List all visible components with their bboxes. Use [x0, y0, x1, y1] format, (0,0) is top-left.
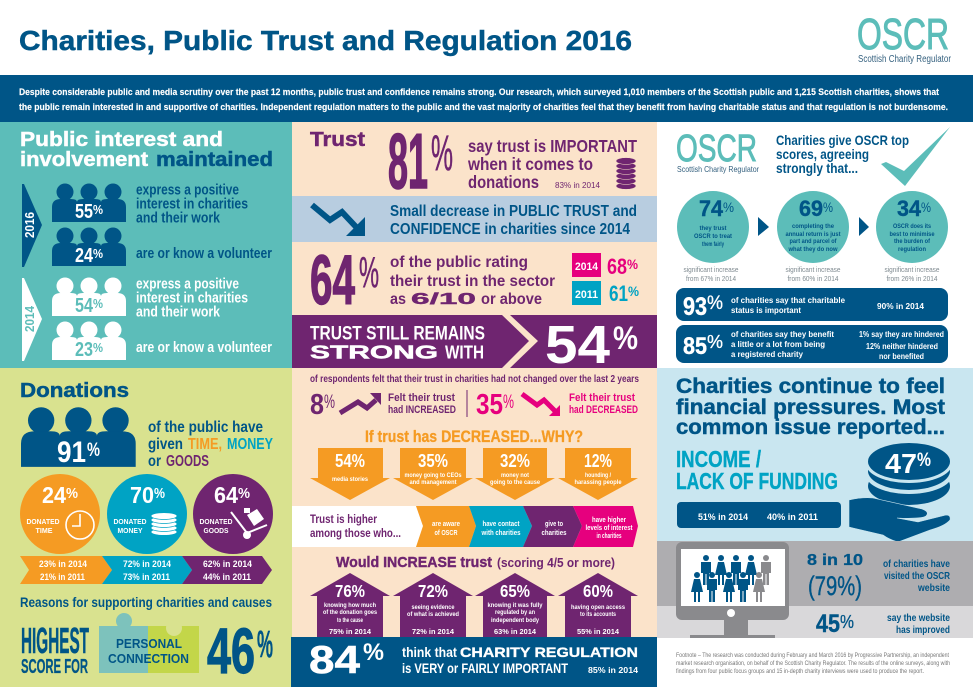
heading: would increase trust: [336, 554, 615, 571]
icon: people 54%: 54: [75, 295, 94, 317]
arrow: 76%: 76%: [335, 581, 365, 601]
heading: public interest: maintained: [156, 149, 273, 171]
band: small decrease: Small decrease in PUBLIC TRUST and: [390, 203, 637, 220]
circle: 74%: they trust: [700, 225, 727, 232]
band: charity regulation 84%: 85% in 2014: [588, 665, 638, 675]
circle: 74%: them fairly: [702, 241, 724, 248]
circle: donated time: DONATED: [26, 517, 60, 526]
text: volunteer 2016: are or know a volunteer: [136, 246, 272, 262]
circle: 74%: [677, 191, 749, 263]
text: significant increases: significant increase: [786, 265, 840, 274]
ribbon: previous years: 21% in 2011: [40, 572, 85, 582]
icon: puzzle personal connection: [99, 613, 199, 673]
text: website improved: has improved: [896, 624, 950, 636]
circle: 74%: %: [723, 199, 734, 215]
band: trust is higher: levels of interest: [586, 525, 633, 532]
bar: previous years: [677, 502, 841, 528]
bar: 85%: 12% neither hindered: [866, 342, 938, 351]
text: given time money goods: or: [148, 453, 161, 470]
logo: OSCR: Scottish Charity Regulator: [858, 54, 952, 65]
arrow: 32%: 32%: [500, 451, 530, 471]
icon: people 24%: 24: [75, 245, 94, 267]
text: visited website: of charities have: [883, 558, 950, 570]
bar: 93%: %: [707, 293, 723, 314]
arrow: 60%: [558, 573, 638, 638]
arrow: 65%: knowing it was fully: [488, 602, 543, 609]
circle: 69%: 69: [799, 196, 823, 221]
arrow: 60%: 55% in 2014: [577, 627, 620, 636]
ribbon: previous years: 23% in 2014: [39, 559, 87, 569]
text: positive interest 2014: interest in charities: [136, 290, 248, 306]
text: trust important: [467, 136, 637, 192]
text: public rating: or above: [481, 291, 542, 308]
band: trust still strong 54%: 54: [545, 315, 610, 375]
icon: people 55%: [52, 184, 126, 223]
stat: 8% increased: 8: [310, 389, 324, 421]
icon: people 23%: %: [93, 340, 103, 355]
stat: 8 in 10: [807, 552, 863, 601]
icon: trolley: [231, 508, 267, 539]
stat: 81%: 81: [388, 117, 428, 205]
icon: people 54%: %: [93, 296, 103, 311]
stat: 46%: 46: [207, 615, 255, 687]
ribbon: previous years: [20, 556, 272, 584]
circle: 69%: what they do now: [788, 246, 838, 253]
arrow: 32%: [475, 448, 555, 500]
stat: 35% decreased: %: [503, 392, 514, 413]
ribbon: previous years: 44% in 2011: [203, 572, 251, 582]
stat: 35% decreased: [476, 389, 638, 421]
icon: people 23%: [52, 322, 126, 361]
band: trust is higher: have contact: [482, 521, 520, 528]
text: significant increases: significant increase: [884, 265, 940, 274]
panel: website: [657, 541, 973, 638]
arrow: 76%: 75% in 2014: [329, 627, 372, 636]
heading: trust: Trust: [310, 129, 365, 151]
text: positive interest 2016: express a positive: [136, 182, 239, 198]
arrow: 65%: 65%: [500, 581, 530, 601]
text: trust important: when it comes to: [467, 154, 593, 174]
band: trust still strong 54%: %: [613, 320, 638, 356]
text: given time money goods: MONEY: [227, 436, 273, 453]
panel: OSCR scores: [676, 127, 950, 363]
band: trust is higher: among those who...: [310, 526, 401, 540]
band: trust still strong 54%: WITH: [445, 342, 484, 362]
text: significant increases: from 26% in 2014: [886, 274, 938, 283]
arrow: 54%: media stories: [332, 476, 368, 483]
band: trust is higher: Trust is higher: [310, 512, 377, 526]
icon: down arrow: [522, 394, 560, 416]
arrow: 2016: 2016: [22, 212, 37, 238]
bar: 93%: of charities say that charitable: [731, 296, 846, 305]
circle: donated goods: GOODS: [204, 526, 228, 535]
text: website improved: say the website: [887, 612, 950, 624]
circle: donated time: TIME: [36, 526, 52, 535]
stat: 35% decreased: had DECREASED: [569, 404, 638, 416]
stat: 2014 68%: %: [627, 256, 638, 272]
icon: puzzle personal connection: CONNECTION: [108, 651, 189, 666]
icon: people 91%: [21, 407, 136, 469]
circle: donated goods: %: [238, 485, 250, 502]
icon: people 55%: 55: [75, 201, 93, 223]
heading: financial pressures: financial pressures. Most: [676, 396, 945, 419]
band: charity regulation 84%: think that: [402, 645, 457, 660]
arrow: 12%: harassing people: [574, 479, 622, 486]
arrow: scores 1: [758, 217, 769, 236]
circle: 34%: 34: [897, 196, 922, 221]
text: positive interest 2016: and their work: [136, 210, 221, 226]
bar: previous years: 40% in 2011: [767, 512, 819, 523]
bar: 93%: 90% in 2014: [877, 301, 924, 311]
stat: 8 in 10: (79%): [808, 571, 862, 601]
band: trust is higher: give to: [545, 521, 563, 528]
bar: previous years: 51% in 2014: [698, 512, 749, 523]
bar: 93%: 93: [683, 293, 707, 321]
arrow: 54%: 54%: [335, 451, 365, 471]
footnote: [676, 652, 950, 675]
circle: donated goods: 64: [214, 482, 238, 508]
stat: 64%: %: [359, 248, 379, 297]
text: trust unchanged: of respondents felt that their trust in charities had not changed over the last 2 years: [310, 373, 639, 385]
panel: donations: %: [257, 624, 273, 666]
heading: public interest: involvement: [20, 149, 148, 171]
text: income lack of funding: [676, 446, 838, 494]
stat: 2011 61%: 61: [609, 281, 628, 306]
icon: people 54%: [52, 278, 126, 317]
band: trust is higher: charities: [542, 530, 567, 537]
bar: 85%: a little or a lot from being: [731, 340, 825, 349]
down arrows: reasons: [310, 448, 638, 500]
circle: 74%: 74: [699, 196, 724, 221]
band: charity regulation 84%: 84: [309, 639, 360, 682]
arrow: 54%: [310, 448, 390, 500]
panel: public interest: [0, 122, 292, 368]
text: given time money goods: [148, 419, 273, 470]
circle: 34%: regulation: [898, 246, 926, 253]
heading: reasons: Reasons for supporting charities and causes: [20, 594, 272, 610]
arrow: 72%: 72%: [418, 581, 448, 601]
band: trust is higher: with charities: [481, 530, 521, 537]
circle: 69%: [777, 191, 849, 263]
arrow: 32%: money not: [501, 472, 529, 479]
circle: 74%: OSCR to treat: [694, 233, 733, 240]
circle: 69%: %: [823, 199, 833, 215]
stat: 2014 68%: [572, 253, 638, 279]
band: trust is higher: have higher: [592, 517, 626, 524]
text: positive interest 2014: [136, 276, 248, 320]
text: public rating: as: [390, 291, 406, 308]
icon: people 24%: %: [93, 246, 103, 261]
circle: donated money: DONATED: [114, 517, 147, 526]
icon: people 91%: %: [87, 440, 100, 461]
text: public rating: of the public rating: [390, 254, 528, 271]
icon: up arrow: [340, 393, 381, 413]
band: trust is higher: [292, 506, 638, 547]
circle: donated time: [20, 474, 100, 554]
icon: puzzle personal connection: PERSONAL: [116, 636, 182, 651]
stat: 2014 68%: 2014: [575, 261, 599, 273]
arrow: 76%: to the cause: [337, 617, 363, 624]
panel: donations: [0, 368, 292, 687]
bar: 85%: of charities say they benefit: [731, 330, 834, 339]
band: trust is higher: in charities: [596, 533, 622, 540]
heading: top scores: [776, 132, 909, 176]
up arrows: would increase: [310, 573, 638, 638]
text: website improved: [887, 612, 950, 636]
stat: 2011 61%: [572, 281, 639, 306]
heading: financial pressures: [676, 375, 945, 439]
stat: 2011 61%: 2011: [575, 289, 598, 301]
band: trust still strong 54%: STRONG: [310, 342, 438, 362]
stat: 8% increased: %: [324, 392, 335, 413]
bar: 85%: nor benefited: [879, 352, 924, 361]
heading: would increase trust: (scoring 4/5 or more): [497, 556, 615, 570]
panel: trust: %: [431, 125, 453, 181]
arrow: 2014: 2014: [22, 305, 37, 332]
band: charity regulation 84%: %: [363, 639, 384, 666]
band: trust is higher: are aware: [432, 521, 460, 528]
text: highest score for: [21, 620, 89, 678]
arrow: 72%: of what is achieved: [407, 611, 459, 618]
band: charity regulation 84%: CHARITY REGULATION: [460, 645, 638, 660]
logo: OSCR small: OSCR: [676, 128, 757, 170]
heading: top scores: Charities give OSCR top: [776, 132, 909, 148]
icon: people 24%: [52, 228, 126, 267]
icon: coin stack: [616, 158, 636, 189]
arrow: 2014: [22, 278, 42, 361]
circle: donated money: [107, 474, 187, 554]
text: volunteer 2014: are or know a volunteer: [136, 340, 272, 356]
heading: top scores: scores, agreeing: [776, 146, 869, 162]
stat: 35% decreased: Felt their trust: [569, 392, 635, 404]
text: visited website: website: [917, 582, 950, 594]
band: charity regulation 84%: is VERY or FAIRLY IMPORTANT: [402, 660, 568, 676]
panel: donations: HIGHEST: [21, 620, 89, 661]
heading: why decreased: If trust has DECREASED...WHY?: [365, 428, 583, 446]
arrow: 72%: 72% in 2014: [412, 627, 455, 636]
arrow: 60%: to its accounts: [580, 611, 616, 618]
footnote: findings from four public focus groups and 15 in-depth charity interviews were used to produce the report.: [676, 668, 924, 675]
icon: people 23%: 23: [75, 339, 93, 361]
text: positive interest 2014: express a positive: [136, 276, 239, 292]
icon: coins in hand 47%: %: [917, 450, 931, 471]
text: positive interest 2014: and their work: [136, 304, 221, 320]
arrow: scores 2: [859, 217, 869, 236]
stat: 2011 61%: %: [628, 283, 639, 299]
circle: donated goods: DONATED: [200, 517, 233, 526]
arrow: 32%: going to the cause: [490, 479, 541, 486]
text: given time money goods: TIME,: [188, 436, 222, 453]
arrow: 35%: money going to CEOs: [404, 472, 462, 479]
circle: donated money: MONEY: [118, 526, 142, 535]
arrow: 65%: independent body: [491, 617, 540, 624]
arrow: 60%: 60%: [583, 581, 613, 601]
text: positive interest 2016: [136, 182, 248, 226]
ribbon: previous years: 73% in 2011: [123, 572, 170, 582]
text: trust important: say trust is IMPORTANT: [468, 136, 637, 156]
circle: donated money: %: [154, 485, 165, 502]
arrow: 76%: of the donation goes: [323, 609, 377, 616]
text: given time money goods: of the public have: [148, 419, 263, 436]
heading: public interest: Public interest and: [20, 129, 223, 151]
circle: 34%: OSCR does its: [893, 223, 931, 230]
circle: donated money: 70: [130, 482, 154, 508]
circle: donated time: 24: [42, 482, 66, 508]
text: visited website: visited the OSCR: [884, 570, 950, 582]
band: trust is higher: of OSCR: [434, 530, 458, 537]
arrow: 65%: [475, 573, 555, 638]
icon: tick: [881, 127, 950, 186]
band: small decrease: CONFIDENCE in charities since 2014: [390, 221, 630, 238]
text: income lack of funding: LACK OF FUNDING: [676, 468, 838, 494]
icon: coins in hand 47%: [849, 443, 952, 542]
arrow: 35%: and management: [410, 479, 456, 486]
arrow: 72%: [393, 573, 473, 638]
band: trust still strong 54%: TRUST STILL REMAINS: [310, 322, 485, 344]
stat: 64%: 64: [310, 241, 355, 319]
arrow: 76%: knowing how much: [324, 602, 376, 609]
ribbon: previous years: 62% in 2014: [203, 559, 252, 569]
circle: 34%: %: [921, 199, 931, 215]
stat: 45%: %: [840, 612, 854, 632]
bar: 85%: %: [707, 332, 723, 352]
text: significant increases: from 67% in 2014: [686, 274, 736, 283]
icon: coins in hand 47%: 47: [885, 448, 917, 479]
text: public rating: 6/10: [411, 291, 476, 308]
icon: coins: [151, 513, 177, 535]
stat: 8 in 10: 8 in 10: [807, 552, 863, 569]
bar: 93%: [676, 288, 948, 321]
text: trust important: donations: [468, 172, 539, 192]
icon: people 91%: 91: [57, 436, 86, 469]
icon: down arrow: [312, 205, 365, 236]
circle: 34%: the burden of: [894, 238, 931, 245]
panel: financial pressures: [657, 368, 973, 542]
circle: 69%: completing the: [792, 223, 834, 230]
arrow: 76%: [310, 573, 390, 638]
icon: clock: [66, 511, 94, 539]
text: trust important: 83% in 2014: [555, 180, 600, 190]
band: trust still strong 54%: [292, 315, 657, 375]
icon: monitor with people: [676, 542, 789, 638]
circle: 34%: best to minimise: [890, 231, 935, 238]
arrow: 65%: regulated by an: [495, 609, 535, 616]
heading: financial pressures: common issue reported...: [676, 416, 945, 439]
heading: public interest: [20, 129, 273, 171]
bar: 85%: [676, 325, 948, 363]
arrow: 12%: [558, 448, 638, 500]
bar: 93%: status is important: [731, 306, 801, 315]
arrow: 35%: 35%: [418, 451, 448, 471]
arrow: 12%: 12%: [584, 451, 612, 471]
stat: 8% increased: Felt their trust: [388, 392, 455, 404]
logo: OSCR small: Scottish Charity Regulator: [677, 164, 759, 174]
text: visited website: [883, 558, 950, 594]
arrow: 12%: hounding /: [585, 472, 611, 479]
text: positive interest 2016: interest in charities: [136, 196, 248, 212]
heading: top scores: strongly that...: [776, 160, 858, 176]
arrow: 35%: [393, 448, 473, 500]
band: small decrease: [292, 196, 657, 242]
icon: people 55%: %: [93, 202, 103, 217]
intro band: [0, 75, 973, 122]
arrow: 60%: having open access: [571, 604, 626, 611]
stat: 35% decreased: 35: [476, 389, 503, 421]
circle: 69%: annual return is just: [786, 231, 841, 238]
arrow: 65%: 63% in 2014: [494, 627, 537, 636]
ribbon: previous years: 72% in 2014: [123, 559, 171, 569]
text: income lack of funding: INCOME /: [676, 446, 761, 472]
text: given time money goods: given: [148, 436, 183, 453]
arrow: 2016: [22, 184, 42, 267]
stat: 45%: 45: [816, 610, 840, 638]
title: Charities, Public Trust and Regulation 2016: [19, 25, 632, 56]
heading: donations: Donations: [20, 380, 129, 402]
heading: would increase trust: Would INCREASE trust: [336, 554, 492, 571]
bar: 85%: 1% say they are hindered: [859, 330, 944, 339]
bar: 85%: 85: [683, 333, 707, 360]
circle: donated time: %: [66, 485, 78, 502]
stat: 8% increased: had INCREASED: [388, 404, 456, 416]
text: public rating: [390, 254, 555, 308]
stat: 2014 68%: 68: [607, 254, 627, 279]
circle: 69%: part and parcel of: [790, 238, 837, 245]
stat: 8% increased: [310, 389, 456, 421]
bar: 85%: a registered charity: [731, 350, 804, 359]
panel: trust: [291, 117, 657, 687]
band: charity regulation 84%: [291, 637, 657, 687]
circle: donated goods: [193, 474, 273, 554]
circle: 34%: [876, 191, 948, 263]
text: highest score for: SCORE FOR: [21, 656, 88, 678]
arrow: 72%: seeing evidence: [412, 604, 455, 611]
text: public rating: their trust in the sector: [390, 273, 555, 290]
text: significant increases: significant increase: [684, 265, 738, 274]
text: given time money goods: GOODS: [166, 453, 209, 470]
text: significant increases: [684, 265, 940, 283]
text: significant increases: from 60% in 2014: [788, 274, 838, 283]
heading: financial pressures: Charities continue to feel: [676, 375, 945, 398]
